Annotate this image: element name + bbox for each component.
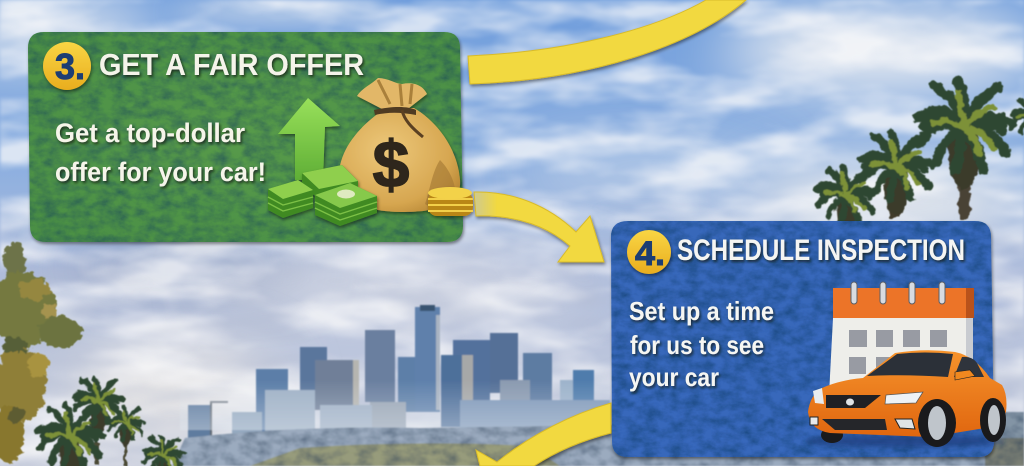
arrow: from panel 3 to panel 4 xyxy=(474,192,604,262)
right palms xyxy=(817,82,1024,234)
heading underline xyxy=(668,268,980,270)
heading underline xyxy=(88,88,358,90)
step number badge 3 xyxy=(43,42,91,90)
heading: get a fair offer: GET A FAIR OFFER xyxy=(99,47,364,82)
icon: gold coins xyxy=(428,187,473,216)
step number badge 4: 4. xyxy=(635,235,665,273)
panel 3 background xyxy=(28,32,463,242)
body text: top-dollar offer: Get a top-dollar xyxy=(55,118,245,148)
panel 4 background xyxy=(611,221,994,457)
body text: set up a time: Set up a time xyxy=(629,296,774,326)
arrow: from panel 4 downward xyxy=(476,403,611,466)
arrow: top curved arrow into panel 3 xyxy=(468,0,746,84)
panel: step 3 get a fair offer xyxy=(28,32,473,242)
step number badge 3: 3. xyxy=(55,46,85,87)
step number badge 4 xyxy=(627,230,671,274)
left palms xyxy=(38,378,184,466)
left tree xyxy=(0,242,82,463)
icon: green up arrow xyxy=(278,98,340,180)
body text: top-dollar offer: offer for your car! xyxy=(55,157,266,187)
heading: schedule inspection: SCHEDULE INSPECTION xyxy=(677,234,965,267)
panel: step 4 schedule inspection xyxy=(611,221,1006,457)
LA skyline xyxy=(172,305,1024,466)
icon: calendar xyxy=(829,282,974,395)
icon: orange car xyxy=(805,350,1006,447)
icon: money bag: $ xyxy=(373,127,409,201)
icon: money bag xyxy=(339,78,460,212)
body text: set up a time xyxy=(629,296,774,392)
body text: set up a time: your car xyxy=(629,362,719,392)
body text: set up a time: for us to see xyxy=(630,330,764,360)
icon: cash stacks xyxy=(268,165,377,226)
body text: top-dollar offer xyxy=(55,118,266,187)
